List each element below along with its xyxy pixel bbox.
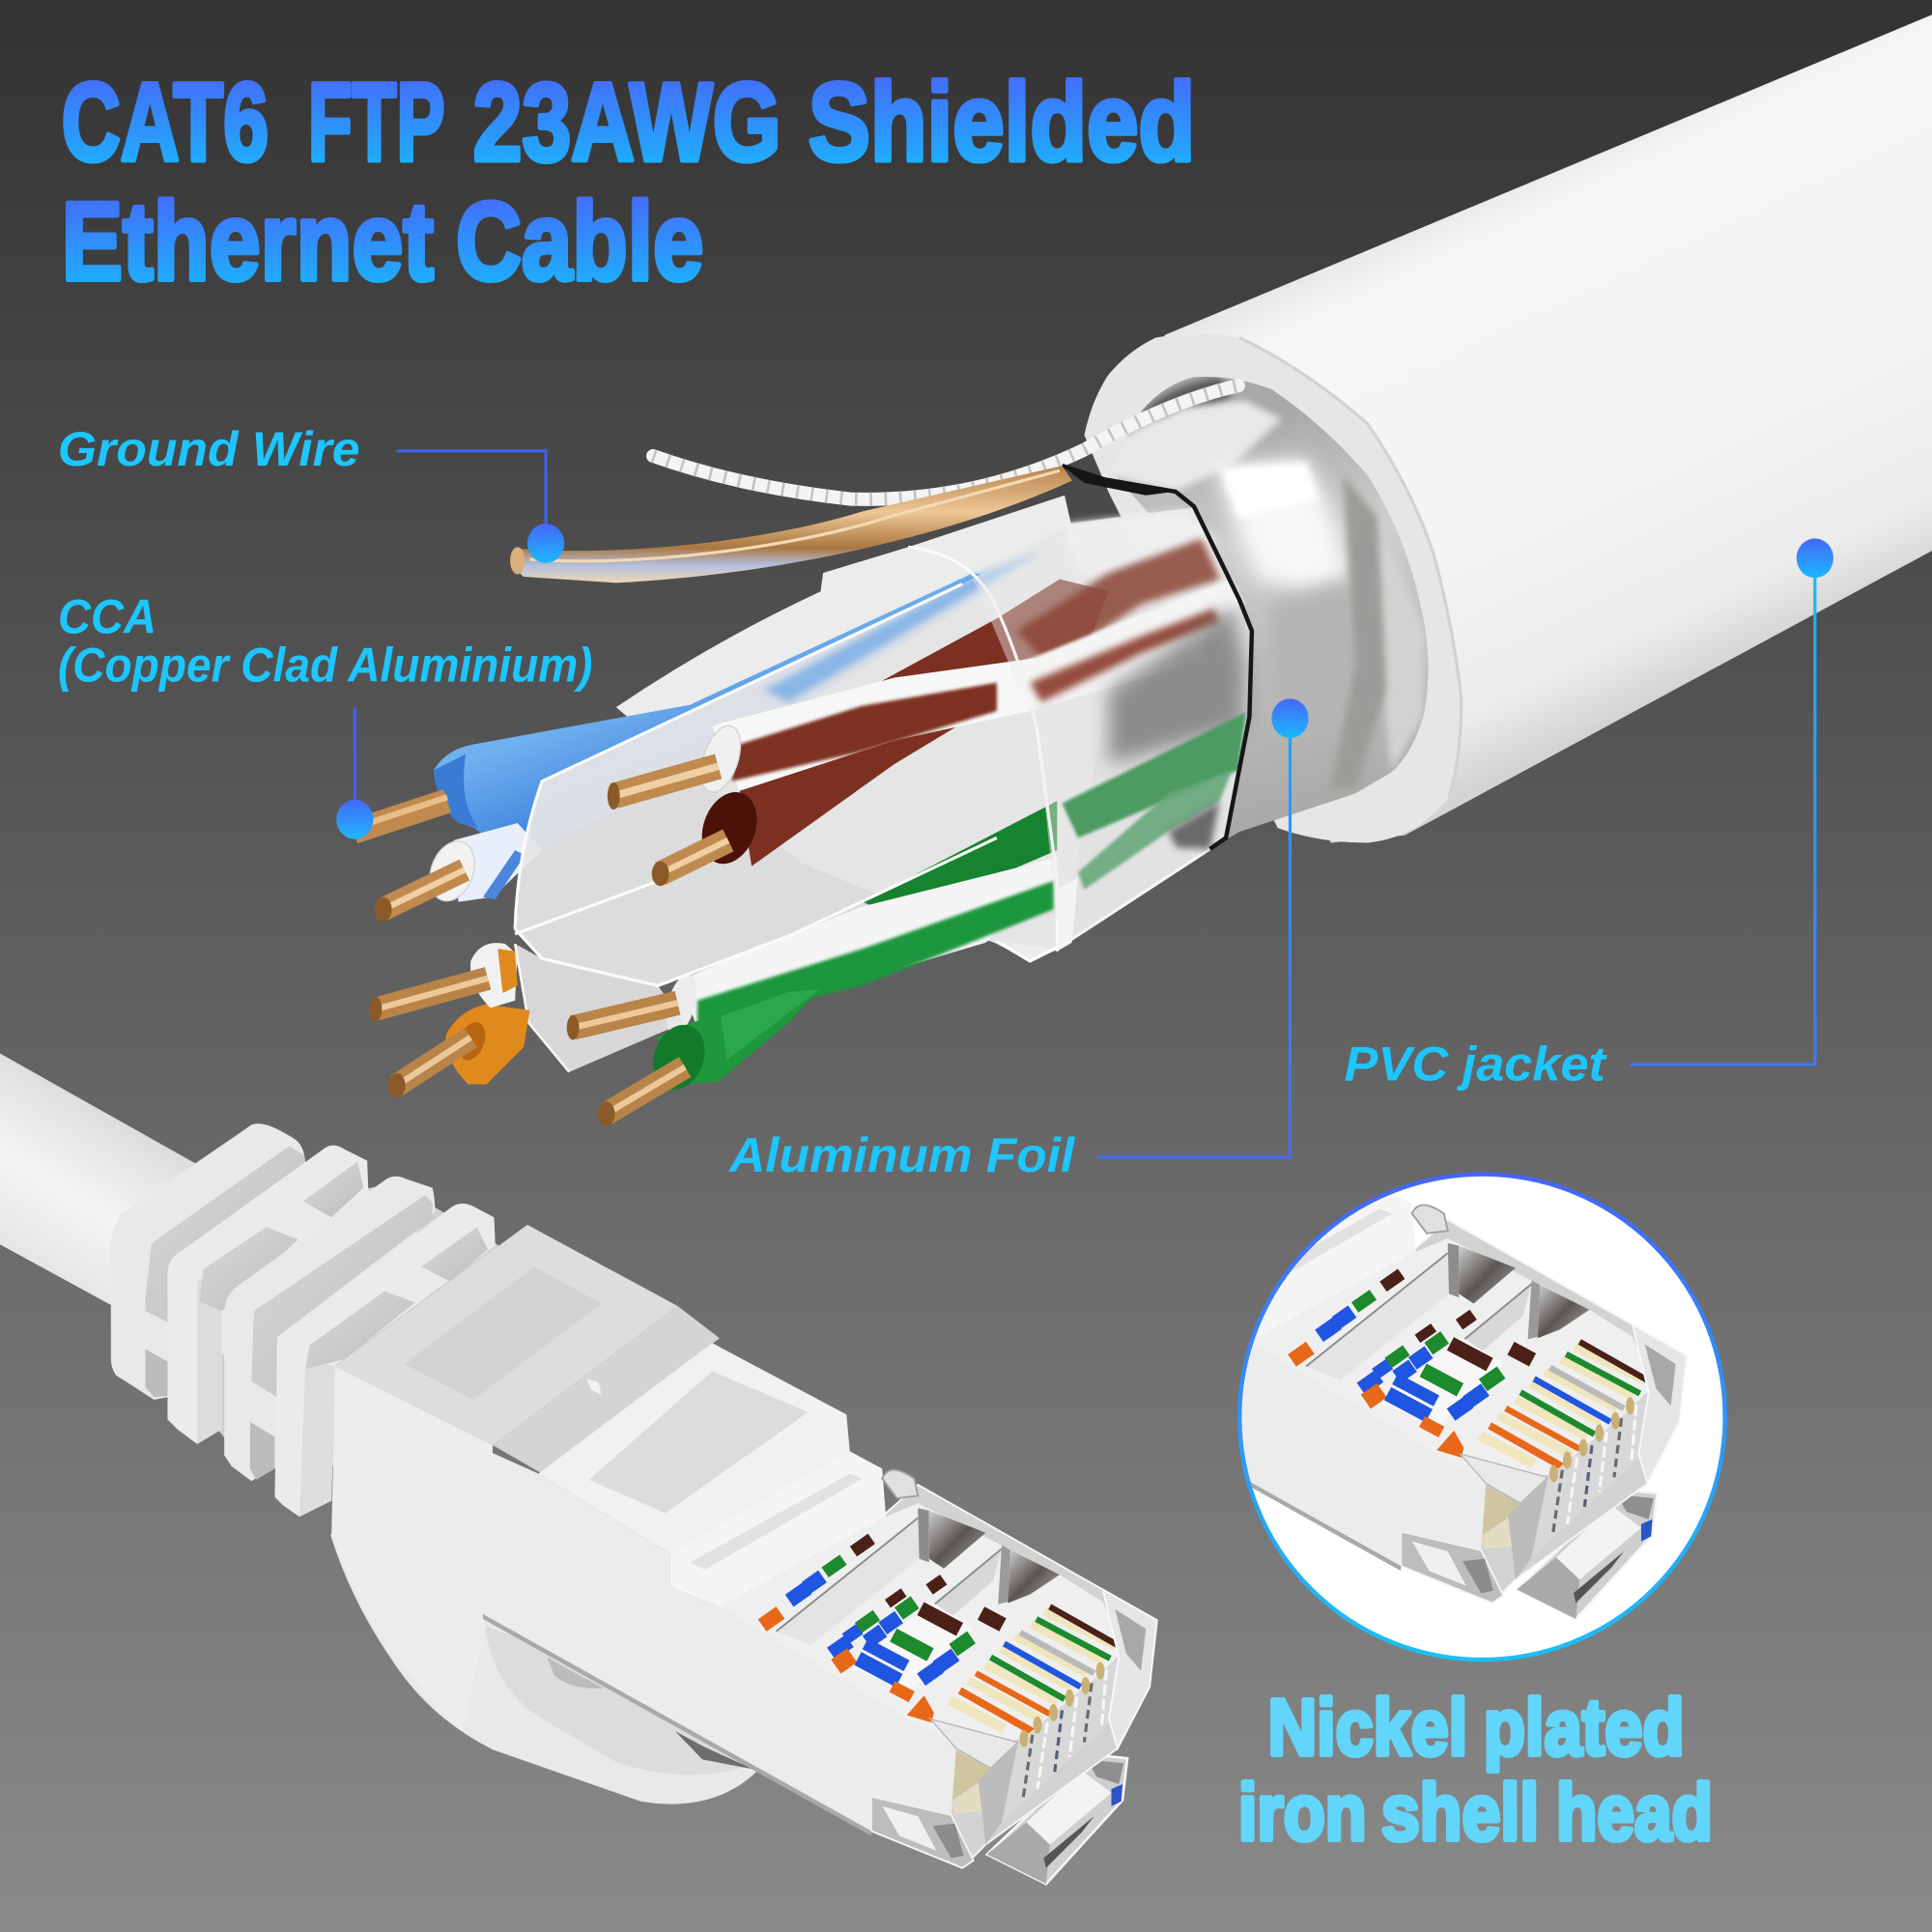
title line one: FTP	[308, 61, 444, 185]
title line two: Ethernet	[62, 181, 434, 304]
crumpled top foil	[1109, 397, 1283, 495]
boot core	[160, 1182, 518, 1466]
white and blue wire	[422, 823, 542, 907]
label: CCA	[58, 590, 593, 839]
blue glimpse through film	[764, 549, 1047, 702]
title	[62, 61, 1195, 304]
blurred brown	[1016, 538, 1220, 666]
housing top face	[335, 1225, 678, 1445]
label: Aluminum Foil: Aluminum Foil	[727, 1128, 1075, 1182]
window floor	[719, 1503, 1123, 1748]
top streak highlight	[1060, 510, 1220, 579]
grey foil reflection	[1109, 607, 1247, 764]
caption line two: iron	[1238, 1767, 1367, 1857]
clear latch hook	[882, 1470, 918, 1498]
blurred green	[1062, 712, 1246, 838]
glass shelf and silver column	[930, 1719, 1018, 1768]
housing top recess	[404, 1266, 601, 1400]
blurred white tube	[1014, 579, 1244, 712]
white and green wire	[661, 858, 1057, 1037]
label: Ground Wire	[58, 422, 564, 563]
clear film, main front section	[515, 508, 1252, 985]
wire bundle	[354, 466, 1252, 1126]
shell raised patch	[589, 1372, 809, 1513]
caption line two	[1238, 1767, 1713, 1857]
jacket body	[1164, 14, 1932, 842]
foil shaded bands	[1269, 574, 1351, 682]
white and brown wire	[694, 604, 1213, 797]
jacket rim	[1084, 334, 1462, 842]
label: PVC jacket: PVC jacket	[1345, 1037, 1608, 1092]
caption line two: shell	[1381, 1767, 1539, 1857]
title line one: 23AWG	[473, 61, 781, 185]
ground wire	[510, 466, 1072, 582]
glass partitions and pockets	[777, 1508, 1060, 1690]
RJ45 connector with cable and boot	[0, 1054, 1157, 1884]
label: PVC jacket	[1345, 538, 1833, 1092]
glass comb below contacts	[979, 1661, 1117, 1844]
shell front band	[670, 1452, 886, 1606]
boot fin 2	[167, 1146, 368, 1444]
gold contact tips	[1019, 1662, 1104, 1747]
orange wires	[446, 943, 529, 1084]
green wires behind	[863, 801, 1057, 918]
jacket opening and aluminium foil shield	[1109, 377, 1428, 838]
label: Ground Wire: Ground Wire	[58, 422, 359, 476]
caption line one	[1267, 1682, 1685, 1772]
shell opening cream interior	[952, 1750, 991, 1801]
clear notch tab	[871, 1797, 974, 1868]
foil black seam	[1062, 466, 1252, 849]
boot fin 1	[111, 1123, 305, 1400]
film folded edges and creases	[515, 547, 1210, 985]
copper conductor ends	[370, 782, 669, 1126]
boot fin 4	[274, 1204, 496, 1517]
clip underside	[330, 1534, 788, 1804]
lower film section	[515, 944, 684, 1072]
strain relief boot	[111, 1123, 518, 1517]
boot fin 3	[224, 1177, 435, 1481]
blurred wires seen through the film near the foil	[974, 508, 1249, 952]
shell top plate	[538, 1343, 850, 1553]
shell side face	[483, 1452, 956, 1831]
contact pins	[950, 1606, 1123, 1732]
caption line one: plated	[1484, 1682, 1685, 1772]
dark shadow at top of opening	[1140, 377, 1233, 425]
blue wire	[434, 573, 1010, 863]
housing left face	[331, 1367, 493, 1731]
clear head body	[719, 1485, 1157, 1868]
blurred brown in tube	[1030, 609, 1220, 702]
solid green wire	[644, 988, 820, 1096]
caption line two: head	[1556, 1767, 1713, 1857]
cable jacket	[1060, 14, 1932, 875]
title line two: Cable	[456, 181, 703, 304]
label: CCA: CCA	[58, 590, 156, 644]
white cable to connector	[0, 1054, 197, 1319]
label: CCA: (Copper Clad Aluminium)	[58, 638, 593, 692]
title line one: Shielded	[809, 61, 1195, 185]
right glass block	[1103, 1589, 1157, 1748]
solid brown wire	[693, 579, 1109, 871]
title line one	[62, 61, 1195, 185]
label: Aluminum Foil	[727, 698, 1309, 1182]
copper conductors	[354, 766, 728, 1114]
foil highlight	[1213, 458, 1350, 591]
title line one: CAT6	[62, 61, 269, 185]
metal shell collar	[493, 1306, 720, 1474]
caption: Nickel plated iron shell head	[1238, 1682, 1713, 1857]
clear lower tab	[987, 1754, 1127, 1884]
caption line one: Nickel	[1267, 1682, 1467, 1772]
twisted white drain wire	[653, 385, 1238, 499]
back white wire	[616, 496, 1109, 961]
coloured wire cells	[758, 1534, 1007, 1722]
inset circle: connector close-up	[1236, 1172, 1727, 1662]
shell front and window, repeated in inset	[483, 1343, 1157, 1884]
